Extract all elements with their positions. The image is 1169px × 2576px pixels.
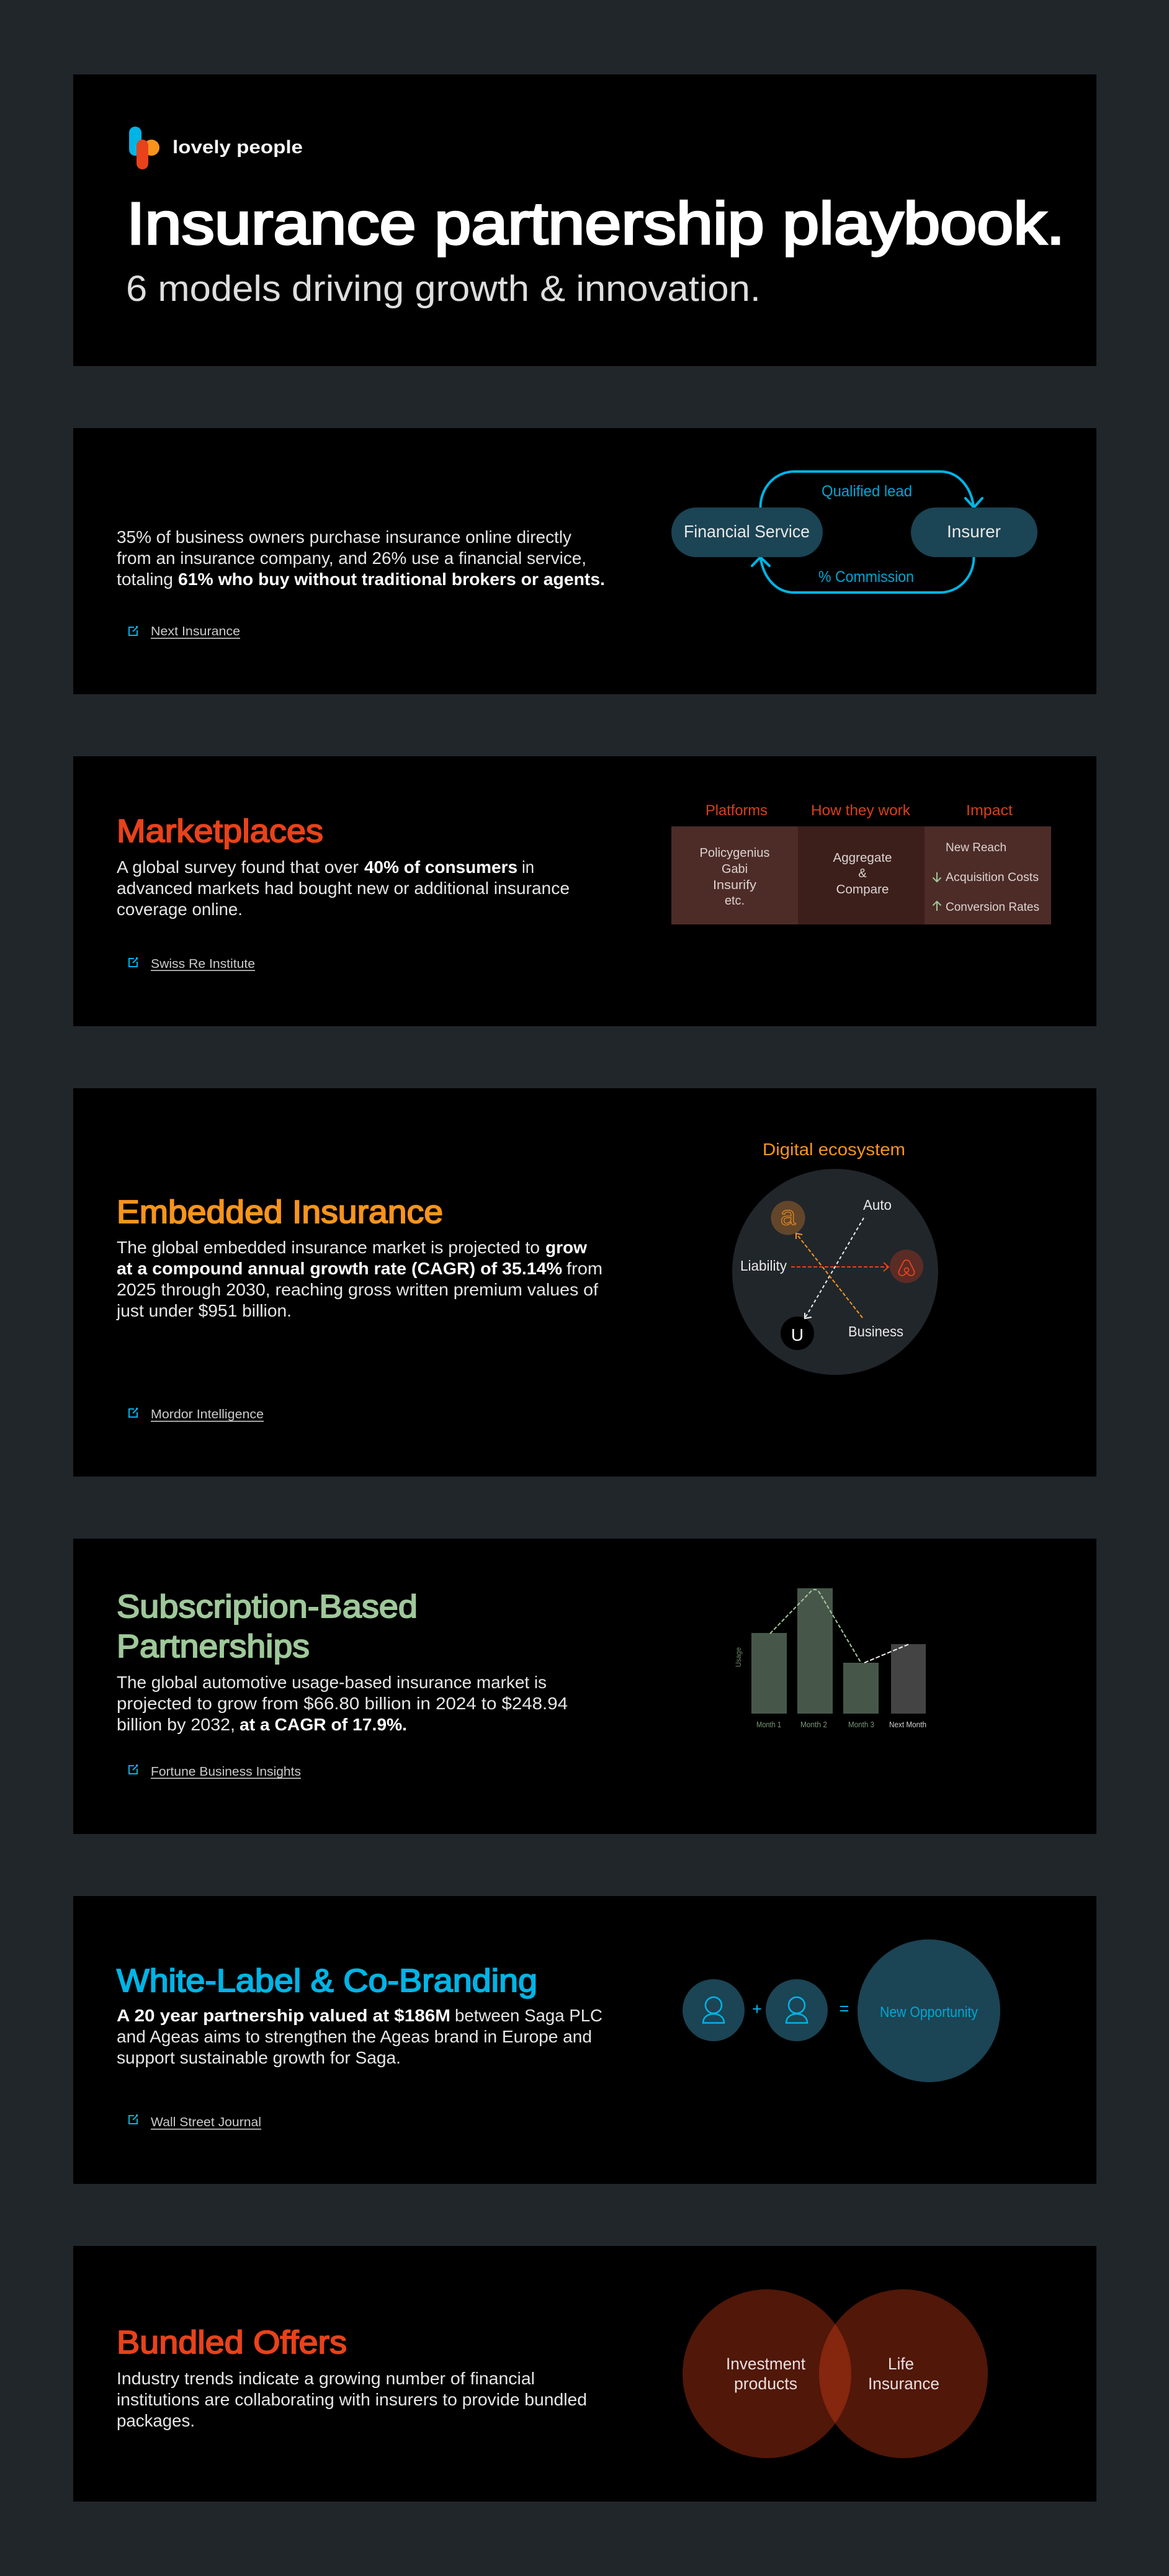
label: liability: Liability bbox=[740, 1258, 787, 1274]
text block: usage-based market: billion by 2032, bbox=[117, 1715, 235, 1734]
label: qualified lead: Qualified lead bbox=[822, 483, 912, 500]
heading: embedded insurance: Embedded Insurance bbox=[117, 1194, 443, 1230]
diagram: referral loop bbox=[671, 472, 1037, 593]
icon: uber bbox=[781, 1317, 814, 1350]
column: how they work bbox=[798, 802, 925, 924]
text block: saga partnership: support sustainable growth for Saga. bbox=[117, 2048, 401, 2067]
label: investment products bbox=[726, 2355, 805, 2393]
node: insurer bbox=[911, 508, 1037, 557]
text block: online purchase statistic: 35% of business owners purchase insurance online directly bbox=[117, 527, 571, 547]
icon: amazon bbox=[771, 1201, 805, 1235]
trend line: forecast bbox=[864, 1644, 909, 1663]
source link: Mordor Intelligence: Mordor Intelligence bbox=[151, 1408, 264, 1421]
text block: saga partnership: and Ageas aims to strengthen the Ageas brand in Europe and bbox=[117, 2027, 592, 2046]
diagram: digital ecosystem bbox=[732, 1140, 938, 1375]
circle: new opportunity: New Opportunity bbox=[880, 2004, 978, 2021]
text block: saga partnership: between Saga PLC bbox=[455, 2006, 602, 2025]
icon: partner one bbox=[683, 1979, 745, 2041]
heading: white-label and co-branding: White-Label & Co-Branding bbox=[117, 1963, 537, 1999]
diagram: partner equation bbox=[683, 1939, 1000, 2082]
panel: marketplaces bbox=[73, 756, 1096, 1026]
column: how they work: Compare bbox=[836, 883, 889, 897]
arrow: auto to uber bbox=[805, 1218, 864, 1318]
arrow: commission bbox=[752, 557, 974, 593]
panel: financial service referral bbox=[73, 428, 1096, 694]
text block: industry trends bbox=[117, 2369, 587, 2430]
icon: amazon: a bbox=[781, 1201, 796, 1231]
text block: online purchase statistic bbox=[117, 527, 605, 589]
text block: global survey: A global survey found that over bbox=[117, 857, 359, 877]
heading: subscription-based partnerships: Partnerships bbox=[117, 1629, 310, 1665]
text block: usage-based market: at a CAGR of 17.9%. bbox=[240, 1715, 407, 1734]
heading: subscription-based partnerships bbox=[117, 1589, 418, 1665]
icon: plus bbox=[753, 2005, 761, 2013]
icon: uber: U bbox=[791, 1325, 804, 1344]
source link: Next Insurance: Next Insurance bbox=[151, 625, 240, 638]
label: investment products: products bbox=[734, 2374, 797, 2393]
text block: online purchase statistic: totaling bbox=[117, 570, 173, 589]
panel: subscription-based partnerships bbox=[73, 1539, 1096, 1834]
circle: new opportunity bbox=[858, 1939, 1000, 2082]
node: financial service: Financial Service bbox=[684, 522, 810, 541]
axis label: usage: Usage bbox=[734, 1647, 743, 1667]
column: impact bbox=[925, 802, 1051, 924]
table: marketplace model bbox=[671, 802, 1051, 924]
arrow: qualified lead bbox=[761, 472, 982, 508]
logo: lovely people bbox=[129, 127, 303, 169]
text block: global survey: in bbox=[522, 857, 534, 877]
label: commission: % Commission bbox=[818, 568, 914, 586]
source link: Swiss Re Institute: Swiss Re Institute bbox=[151, 957, 255, 971]
text block: usage-based market: The global automotive usage-based insurance market is bbox=[117, 1673, 547, 1692]
column: platforms: etc. bbox=[725, 894, 745, 908]
column: impact: Conversion Rates bbox=[946, 901, 1039, 914]
panel: white-label and co-branding bbox=[73, 1896, 1096, 2184]
column: impact: New Reach bbox=[946, 841, 1006, 854]
text block: market projection bbox=[116, 1238, 602, 1320]
label: business: Business bbox=[848, 1323, 903, 1339]
heading: marketplaces: Marketplaces bbox=[117, 813, 323, 849]
text block: market projection: just under $951 billion. bbox=[116, 1301, 292, 1320]
axis labels: months: Month 1 bbox=[756, 1720, 781, 1729]
axis labels: months: Month 2 bbox=[800, 1720, 827, 1729]
text block: usage-based market: projected to grow from $66.80 billion in 2024 to $248.94 bbox=[117, 1694, 568, 1713]
source link: Wall Street Journal: Wall Street Journal bbox=[151, 2116, 261, 2129]
icon: partner two bbox=[766, 1979, 828, 2041]
panel: embedded insurance bbox=[73, 1088, 1096, 1477]
label: investment products: Investment bbox=[726, 2355, 805, 2373]
icon: equals bbox=[840, 2006, 848, 2011]
text block: industry trends: institutions are collaborating with insurers to provide bundled bbox=[117, 2390, 587, 2409]
label: life insurance bbox=[868, 2355, 939, 2393]
title: Insurance partnership playbook. bbox=[127, 190, 1065, 257]
text block: market projection: from bbox=[567, 1259, 602, 1278]
node: financial service bbox=[671, 508, 823, 557]
panel: bundled offers bbox=[73, 2246, 1096, 2502]
text block: market projection: at a compound annual growth rate (CAGR) of 35.14% bbox=[117, 1259, 562, 1278]
node: insurer: Insurer bbox=[947, 522, 1001, 541]
label: auto: Auto bbox=[863, 1197, 892, 1213]
label: life insurance: Insurance bbox=[868, 2374, 939, 2393]
column: platforms: Policygenius bbox=[700, 846, 769, 860]
logo: lovely people: lovely people bbox=[172, 137, 303, 158]
venn diagram: investment and life insurance bbox=[683, 2289, 988, 2458]
heading: subscription-based partnerships: Subscription-Based bbox=[117, 1589, 418, 1625]
column: impact: Acquisition Costs bbox=[946, 871, 1039, 884]
text block: global survey: coverage online. bbox=[117, 900, 243, 919]
heading: bundled offers: Bundled Offers bbox=[117, 2325, 347, 2361]
arrow: business to amazon bbox=[796, 1233, 862, 1318]
text block: market projection: The global embedded insurance market is projected to bbox=[117, 1238, 540, 1257]
column: how they work: Aggregate bbox=[833, 851, 892, 865]
panel: header bbox=[73, 74, 1096, 366]
axis labels: months: Month 3 bbox=[848, 1720, 874, 1729]
column: platforms bbox=[671, 802, 798, 924]
column: platforms: Insurify bbox=[713, 879, 756, 892]
column: how they work: How they work bbox=[811, 802, 911, 819]
chart: monthly usage bars bbox=[734, 1588, 926, 1729]
column: impact: Impact bbox=[966, 802, 1013, 819]
text block: industry trends: packages. bbox=[117, 2411, 195, 2430]
text block: global survey bbox=[117, 857, 570, 919]
text block: global survey: advanced markets had bought new or additional insurance bbox=[117, 879, 570, 898]
column: platforms: Gabi bbox=[722, 862, 748, 876]
text block: industry trends: Industry trends indicate a growing number of financial bbox=[117, 2369, 535, 2388]
text block: saga partnership bbox=[117, 2006, 602, 2067]
text block: global survey: 40% of consumers bbox=[364, 857, 517, 877]
text block: online purchase statistic: 61% who buy without traditional brokers or agents. bbox=[178, 570, 605, 589]
text block: usage-based market bbox=[117, 1673, 568, 1734]
trend line: actual usage bbox=[770, 1590, 861, 1662]
subtitle: 6 models driving growth & innovation. bbox=[126, 269, 761, 309]
arrow: liability to airbnb bbox=[791, 1263, 889, 1271]
axis labels: months bbox=[756, 1720, 926, 1729]
axis labels: months: Next Month bbox=[889, 1720, 926, 1729]
text block: saga partnership: A 20 year partnership valued at $186M bbox=[117, 2006, 450, 2025]
text block: market projection: 2025 through 2030, reaching gross written premium values of bbox=[117, 1280, 598, 1299]
label: digital ecosystem: Digital ecosystem bbox=[763, 1140, 905, 1159]
text block: online purchase statistic: from an insurance company, and 26% use a financial service, bbox=[117, 548, 586, 568]
text block: market projection: grow bbox=[545, 1238, 587, 1257]
label: life insurance: Life bbox=[888, 2355, 914, 2373]
column: platforms: Platforms bbox=[705, 802, 768, 819]
column: how they work: & bbox=[858, 867, 867, 880]
icon: airbnb bbox=[890, 1250, 923, 1283]
source link: Fortune Business Insights: Fortune Business Insights bbox=[151, 1765, 301, 1779]
